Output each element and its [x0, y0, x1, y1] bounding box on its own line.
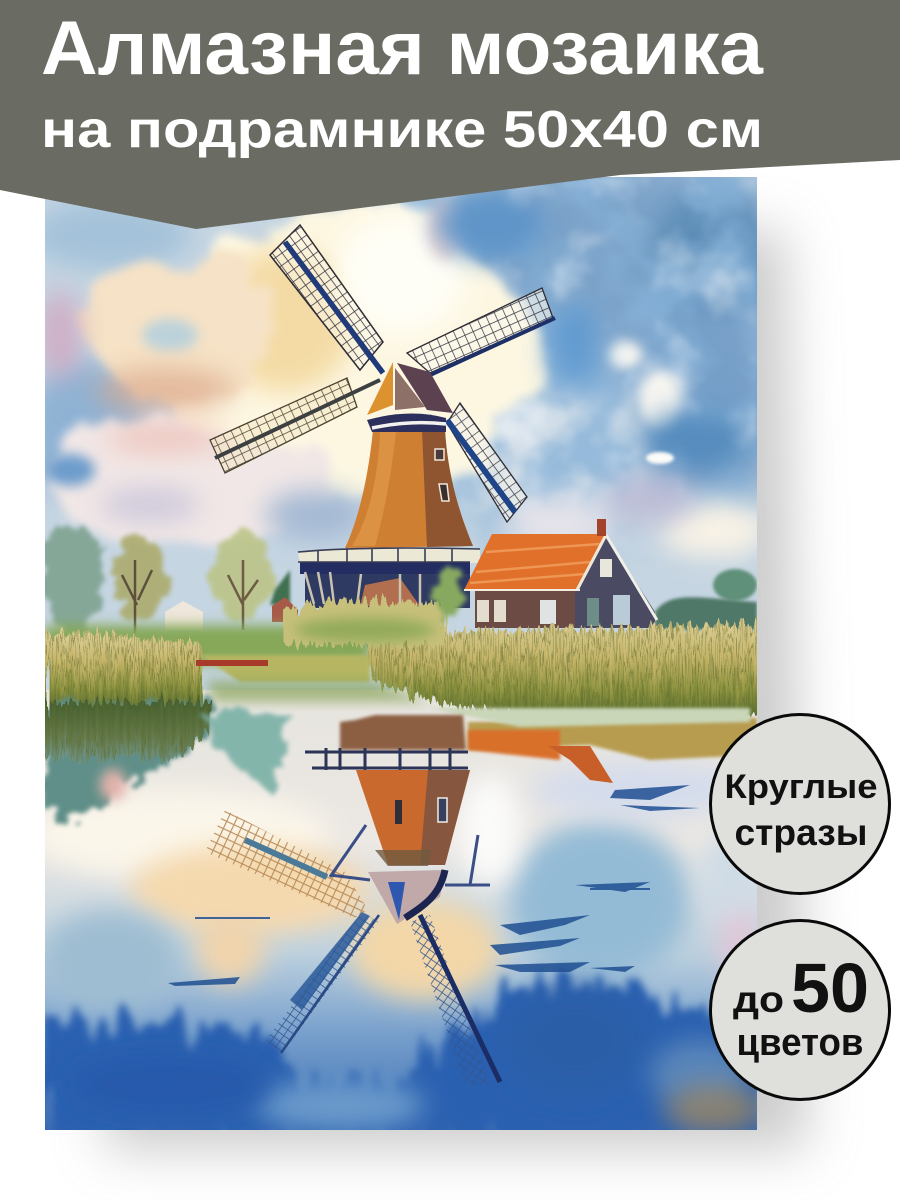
farmhouse: [464, 519, 657, 628]
reeds: left bank: [45, 633, 430, 708]
water ripples: [168, 785, 700, 986]
title: main heading: Алмазная мозаика: [41, 6, 764, 91]
sky background: [45, 177, 757, 690]
badge: up to 50 colours: до: [733, 979, 784, 1020]
title: subheading: на подрамнике 50х40 см: [41, 101, 763, 159]
reflected windmill: [205, 715, 500, 1085]
badge: up to 50 colours: 50: [791, 949, 869, 1027]
water and sky reflection: [30, 690, 765, 1140]
reflected reeds and trees: [45, 702, 757, 825]
badge: up to 50 colours: [710, 920, 890, 1100]
top banner background: [0, 0, 900, 229]
badge: round rhinestones: [710, 714, 890, 894]
windmill tower: [345, 362, 473, 548]
badge: round rhinestones: Круглые: [724, 768, 878, 806]
windmill gallery: [298, 548, 480, 608]
reeds: right bank: [285, 575, 800, 716]
badge: up to 50 colours: цветов: [736, 1022, 864, 1064]
clouds: [38, 190, 770, 560]
far treeline and bushes: [40, 526, 757, 665]
windmill sails: [210, 225, 555, 522]
canvas drop shadow: [100, 230, 808, 1150]
badge: round rhinestones: стразы: [734, 812, 868, 853]
canvas painting: windmill by the water: [45, 177, 757, 1130]
